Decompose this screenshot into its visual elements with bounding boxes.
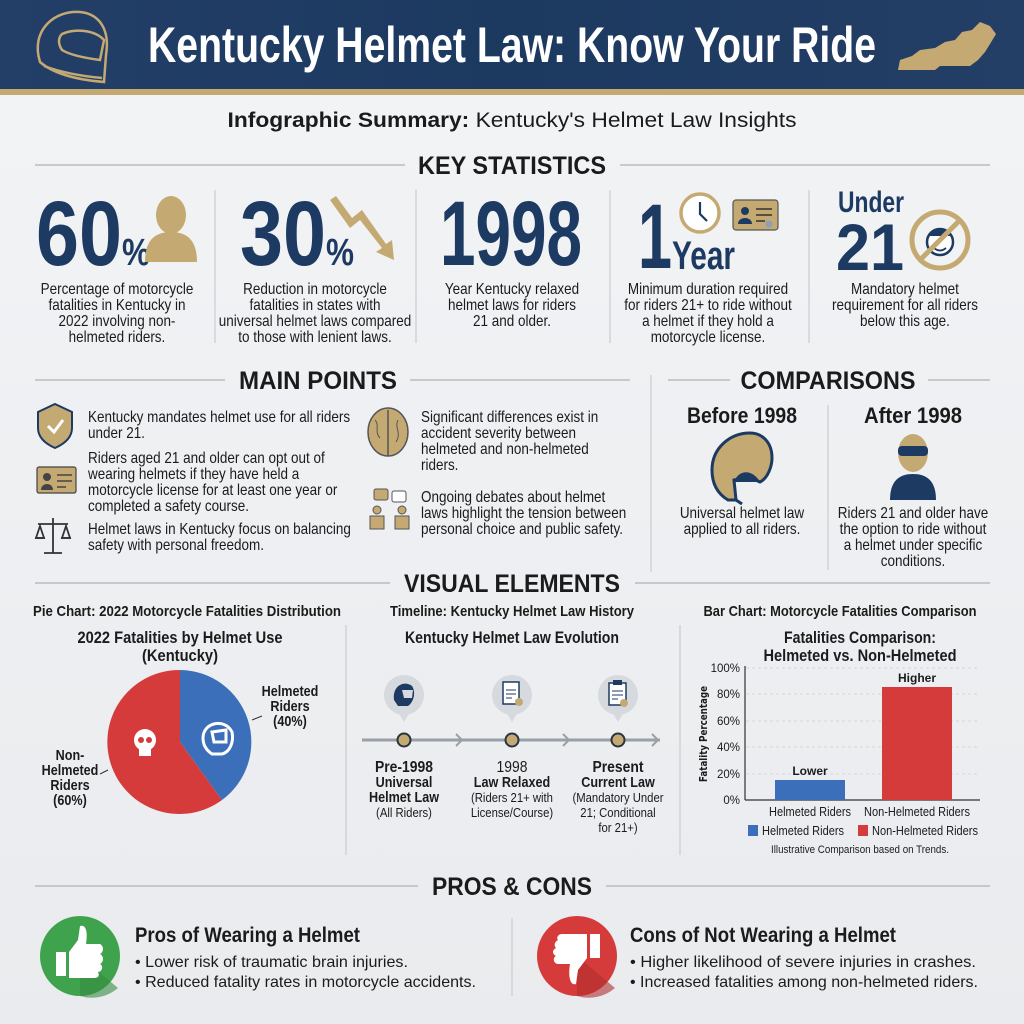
stat: 1998	[440, 183, 582, 330]
bars	[775, 780, 845, 800]
pie chart panel: (60%)	[53, 792, 87, 808]
heading: visual elements: VISUAL ELEMENTS	[404, 570, 620, 598]
bar chart panel: 80%	[717, 689, 740, 701]
pie chart panel: 2022 Fatalities by Helmet Use	[78, 628, 282, 647]
bar chart panel: Bar Chart: Motorcycle Fatalities Comparison	[704, 603, 976, 620]
main points left column: Riders aged 21 and older can opt out of	[88, 450, 326, 467]
stat: under 21: Under	[838, 186, 904, 219]
stat: 1 year: a helmet if they hold a	[642, 313, 775, 330]
bar chart panel: Fatalities Comparison:	[784, 628, 936, 647]
legend: Non-Helmeted Riders	[872, 823, 978, 838]
main points right column: Ongoing debates about helmet	[421, 489, 605, 506]
heading: pros and cons: PROS & CONS	[432, 873, 592, 901]
main points right column: laws highlight the tension between	[421, 505, 626, 522]
icon: clock	[681, 194, 719, 232]
timeline panel: Helmet Law	[369, 789, 439, 805]
main points left column: Kentucky mandates helmet use for all riders	[88, 409, 350, 426]
icon: debate people	[370, 489, 409, 529]
icon: shield	[38, 404, 72, 448]
timeline panel: (All Riders)	[376, 805, 432, 820]
main points right column: personal choice and public safety.	[421, 521, 623, 538]
main points left column: Helmet laws in Kentucky focus on balancing	[88, 521, 351, 538]
cons panel	[537, 916, 978, 998]
comparison: after 1998: Riders 21 and older have	[838, 505, 988, 522]
pie chart panel: (40%)	[273, 713, 307, 729]
pie chart panel	[33, 603, 341, 814]
pros panel	[40, 916, 476, 998]
stat: 1 year: motorcycle license.	[651, 329, 765, 346]
stat: 30%: to those with lenient laws.	[238, 329, 392, 346]
heading: main points: MAIN POINTS	[239, 367, 397, 395]
stat: 1998: 1998	[440, 183, 582, 285]
comparison: after 1998	[838, 403, 988, 570]
timeline panel	[362, 603, 664, 835]
icon: thumbs up	[40, 916, 120, 998]
bar chart panel: Illustrative Comparison based on Trends.	[771, 844, 949, 856]
main points left column: wearing helmets if they have held a	[87, 466, 300, 483]
main points right column	[368, 408, 626, 538]
bar chart panel: Higher	[898, 671, 936, 685]
comparison: before 1998	[680, 403, 805, 538]
stat: 1998: Year Kentucky relaxed	[445, 281, 579, 298]
icon: helmet outline	[38, 12, 107, 82]
pros panel: • Lower risk of traumatic brain injuries.	[135, 954, 408, 971]
pie chart panel: Helmeted	[42, 762, 98, 778]
timeline panel: 21; Conditional	[580, 805, 656, 820]
stat: 60%: Percentage of motorcycle	[41, 281, 193, 298]
stat: 30%: universal helmet laws compared	[219, 313, 411, 330]
bar chart panel: 20%	[717, 769, 740, 781]
main points left column: safety with personal freedom.	[88, 537, 264, 554]
icon: scales	[35, 518, 71, 553]
comparison: before 1998: applied to all riders.	[684, 521, 800, 538]
stat: 60%: helmeted riders.	[69, 329, 165, 346]
timeline panel: Current Law	[581, 774, 655, 790]
pie chart panel: (Kentucky)	[142, 646, 218, 665]
bar chart panel: Fatality Percentage	[697, 686, 710, 782]
comparison: after 1998: the option to ride without	[840, 521, 986, 538]
pie	[107, 670, 251, 814]
icon: brain	[368, 408, 408, 456]
stat: 60%: %	[122, 232, 150, 274]
main points right column: accident severity between	[421, 425, 576, 442]
stat: 60%: 60	[36, 183, 122, 285]
pie chart panel: Pie Chart: 2022 Motorcycle Fatalities Distribution	[33, 603, 341, 620]
bar chart panel: Helmeted vs. Non-Helmeted	[764, 646, 956, 665]
icon: license	[37, 467, 76, 493]
timeline panel: Kentucky Helmet Law Evolution	[405, 628, 619, 647]
cons panel: • Increased fatalities among non-helmeted riders.	[630, 974, 978, 991]
timeline panel: Universal	[376, 774, 432, 790]
cons panel: Cons of Not Wearing a Helmet	[630, 924, 896, 947]
timeline panel: License/Course)	[471, 805, 553, 820]
stat: 1 year: Minimum duration required	[628, 281, 788, 298]
bar chart panel	[697, 603, 980, 856]
stat: 1 year	[624, 186, 792, 346]
pie chart panel: Non-	[56, 747, 84, 763]
stat: 30%: %	[326, 232, 354, 274]
stat: 1 year: 1	[638, 186, 672, 288]
main points right column: helmeted and non-helmeted	[421, 441, 589, 458]
icon: Kentucky state map	[898, 22, 996, 70]
heading: comparisons: COMPARISONS	[740, 367, 916, 395]
timeline panel: for 21+)	[598, 820, 638, 835]
icon: rider	[890, 434, 936, 500]
stat: 60%	[36, 183, 197, 346]
icon: person	[145, 196, 197, 262]
stat: 30%: Reduction in motorcycle	[243, 281, 387, 298]
stat: 1 year: for riders 21+ to ride without	[624, 297, 792, 314]
comparison: after 1998: conditions.	[881, 553, 945, 570]
stat: 1998: 21 and older.	[473, 313, 551, 330]
pie chart panel: Helmeted	[262, 683, 318, 699]
stat: 30%: 30	[240, 183, 326, 285]
icon: gold helmet	[712, 433, 772, 504]
timeline panel: 1998	[497, 758, 527, 776]
stat: under 21: below this age.	[860, 313, 950, 330]
bar chart panel: Lower	[792, 764, 828, 778]
subtitle: Infographic Summary: Kentucky's Helmet Law Insights	[228, 109, 796, 132]
stat: 1998: helmet laws for riders	[448, 297, 576, 314]
timeline panel: Present	[592, 758, 644, 776]
timeline panel: Timeline: Kentucky Helmet Law History	[390, 603, 635, 620]
pie chart panel: Riders	[50, 777, 90, 793]
pros panel: • Reduced fatality rates in motorcycle accidents.	[135, 974, 476, 991]
stat: 60%: fatalities in Kentucky in	[48, 297, 186, 314]
timeline bubbles	[384, 675, 638, 722]
timeline panel: Pre-1998	[375, 758, 433, 776]
stat: 60%: 2022 involving non-	[59, 313, 176, 330]
main points left column: completed a safety course.	[88, 498, 249, 515]
timeline panel: (Riders 21+ with	[471, 790, 553, 805]
stat: under 21: Mandatory helmet	[851, 281, 959, 298]
heading: key statistics: KEY STATISTICS	[418, 152, 606, 180]
cons panel: • Higher likelihood of severe injuries in crashes.	[630, 954, 976, 971]
stat: under 21: 21	[836, 210, 904, 284]
main points left column	[35, 404, 351, 554]
icon: thumbs down	[537, 916, 617, 998]
timeline panel: Law Relaxed	[474, 774, 550, 790]
stat: 1 year: Year	[672, 234, 735, 278]
main points right column: riders.	[421, 457, 458, 474]
comparison: before 1998: Before 1998	[687, 403, 797, 428]
stat: 30%	[219, 183, 411, 346]
icon: no child	[912, 212, 968, 268]
stat: under 21	[832, 186, 978, 330]
header banner	[0, 0, 1024, 95]
stat: under 21: requirement for all riders	[832, 297, 978, 314]
bar chart panel: 100%	[711, 663, 740, 675]
comparison: after 1998: a helmet under specific	[844, 537, 982, 554]
bar chart panel: 0%	[723, 795, 740, 807]
stat: 30%: fatalities in states with	[249, 297, 381, 314]
main points left column: under 21.	[88, 425, 145, 442]
icon: down arrow	[330, 196, 394, 260]
timeline panel: (Mandatory Under	[572, 790, 664, 805]
main points right column: Significant differences exist in	[421, 409, 598, 426]
icon: license card	[733, 200, 778, 230]
comparison: after 1998: After 1998	[864, 403, 962, 428]
pros panel: Pros of Wearing a Helmet	[135, 924, 360, 947]
pie chart panel: Riders	[270, 698, 310, 714]
bar chart panel: 40%	[717, 742, 740, 754]
comparison: before 1998: Universal helmet law	[680, 505, 805, 522]
legend	[748, 823, 978, 838]
bar chart panel: 60%	[717, 716, 740, 728]
main points left column: motorcycle license for at least one year or	[88, 482, 338, 499]
legend: Helmeted Riders	[762, 823, 844, 838]
bar chart panel: Helmeted Riders	[769, 804, 851, 819]
bar chart panel: Non-Helmeted Riders	[864, 804, 970, 819]
